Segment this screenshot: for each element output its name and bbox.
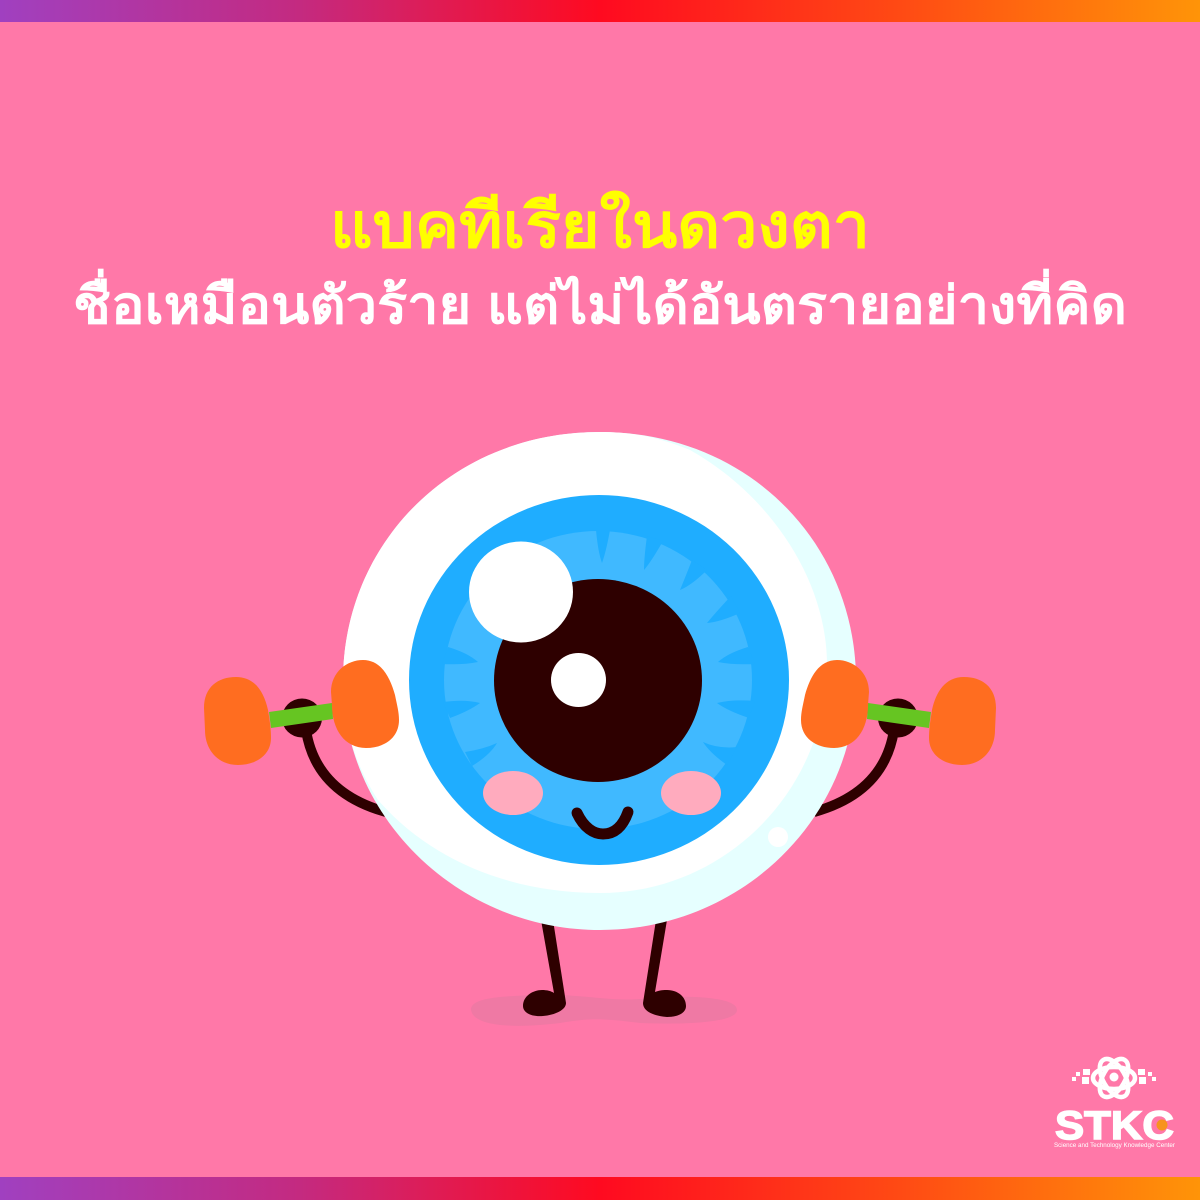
large highlight [469, 542, 573, 642]
ground shadow [471, 995, 737, 1026]
logo atom icon [1093, 1054, 1135, 1102]
STKC logo [1054, 1054, 1175, 1149]
title: แบคทีเรียในดวงตา [330, 190, 870, 261]
left leg and foot [523, 920, 566, 1016]
left cheek [483, 771, 543, 815]
logo orange dot [1156, 1120, 1168, 1130]
logo pixel squares [1072, 1069, 1156, 1084]
smile [577, 812, 628, 834]
iris inner with notches [442, 530, 755, 829]
logo tagline: Science and Technology Knowledge Center [1054, 1143, 1175, 1149]
logo wordmark: STKC [1055, 1104, 1174, 1148]
left arm [282, 698, 386, 812]
subtitle: ชื่อเหมือนตัวร้าย แต่ไม่ได้อันตรายอย่างที่คิด [73, 269, 1127, 335]
small highlight [551, 653, 606, 707]
iris outer [409, 495, 789, 865]
right dumbbell [801, 660, 996, 765]
left dumbbell [204, 660, 399, 765]
top gradient bar [0, 0, 1200, 22]
right leg and foot [643, 920, 686, 1017]
right cheek [661, 771, 721, 815]
eyeball character illustration [204, 432, 996, 1026]
eyeball white [343, 432, 827, 893]
pupil [494, 579, 702, 782]
eyeball rim [343, 432, 856, 930]
bottom gradient bar [0, 1177, 1200, 1200]
small shine dot [768, 827, 788, 847]
right arm [814, 698, 918, 812]
